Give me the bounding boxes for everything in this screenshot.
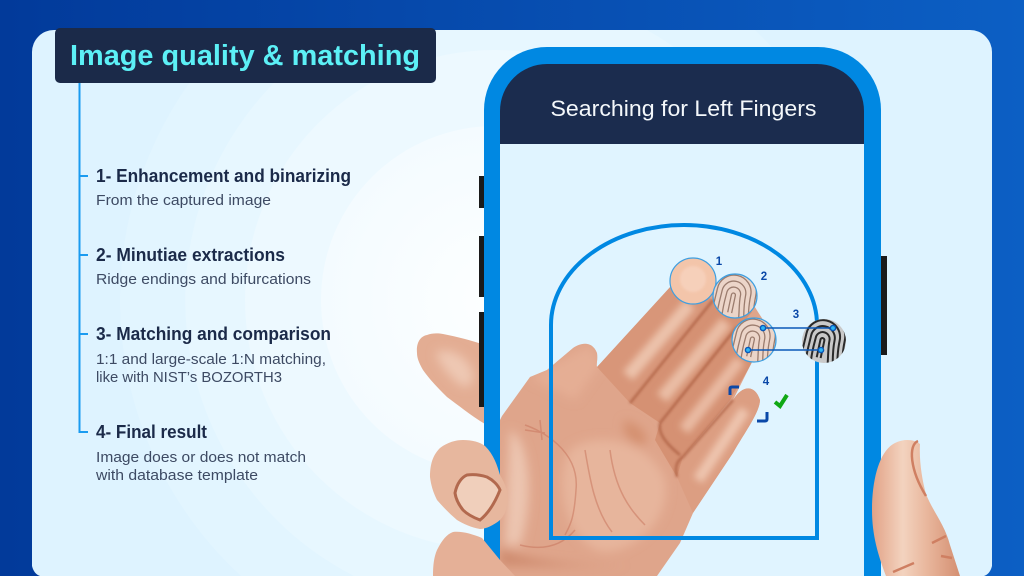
icon: right thumb [872, 440, 960, 576]
phone body [484, 47, 881, 576]
minutiae match lines [745, 325, 836, 353]
palm [500, 287, 762, 576]
step 1 text: From the captured image [96, 193, 271, 209]
finger creases [630, 300, 737, 477]
little finger [677, 388, 760, 513]
fingerprint step 3 [731, 310, 799, 363]
fingerprint step 1 [670, 256, 723, 304]
icon: scanning hand [500, 286, 762, 576]
step number 3: 3 [793, 309, 799, 321]
step 3 text: 1:1 and large-scale 1:N matching, [96, 352, 326, 368]
step 4 text: 4- Final result [96, 422, 207, 442]
step 4 text: with database template [95, 468, 258, 484]
middle finger [630, 300, 752, 423]
phone side buttons [479, 176, 887, 407]
phone header [500, 64, 864, 144]
binarized fingerprint [802, 319, 846, 363]
palm shading [500, 345, 666, 566]
title box [55, 28, 436, 83]
ring finger [655, 327, 752, 477]
icon: top left finger behind phone [417, 333, 485, 424]
step number 1: 1 [716, 256, 723, 268]
fingerprint step 2 [712, 272, 767, 319]
step 2 text: Ridge endings and bifurcations [96, 272, 311, 288]
icon: middle left finger with nail [430, 440, 508, 529]
arch scan frame [551, 225, 817, 538]
index finger [597, 280, 713, 403]
palm lines [520, 420, 645, 547]
step 1 text: 1- Enhancement and binarizing [96, 166, 351, 186]
phone [484, 47, 881, 576]
step 2 text [96, 245, 311, 288]
phone header title: Searching for Left Fingers [550, 96, 816, 121]
step 3 text: like with NIST’s BOZORTH3 [96, 370, 282, 386]
step 3 text: 3- Matching and comparison [96, 324, 331, 344]
step 4 bracket and result [730, 376, 787, 421]
step 2 text: 2- Minutiae extractions [96, 245, 285, 265]
icon: check mark [775, 395, 787, 406]
step 1 text [96, 166, 351, 209]
step 4 text [95, 422, 306, 484]
step 4 text: Image does or does not match [96, 450, 306, 466]
timeline connector [80, 83, 88, 432]
icon: lower left finger [433, 532, 515, 576]
step 4 bracket and result: 4 [763, 376, 770, 388]
step 3 text [96, 324, 331, 386]
step number 2: 2 [761, 271, 767, 283]
title: Image quality & matching [70, 40, 420, 72]
phone screen [500, 144, 864, 576]
